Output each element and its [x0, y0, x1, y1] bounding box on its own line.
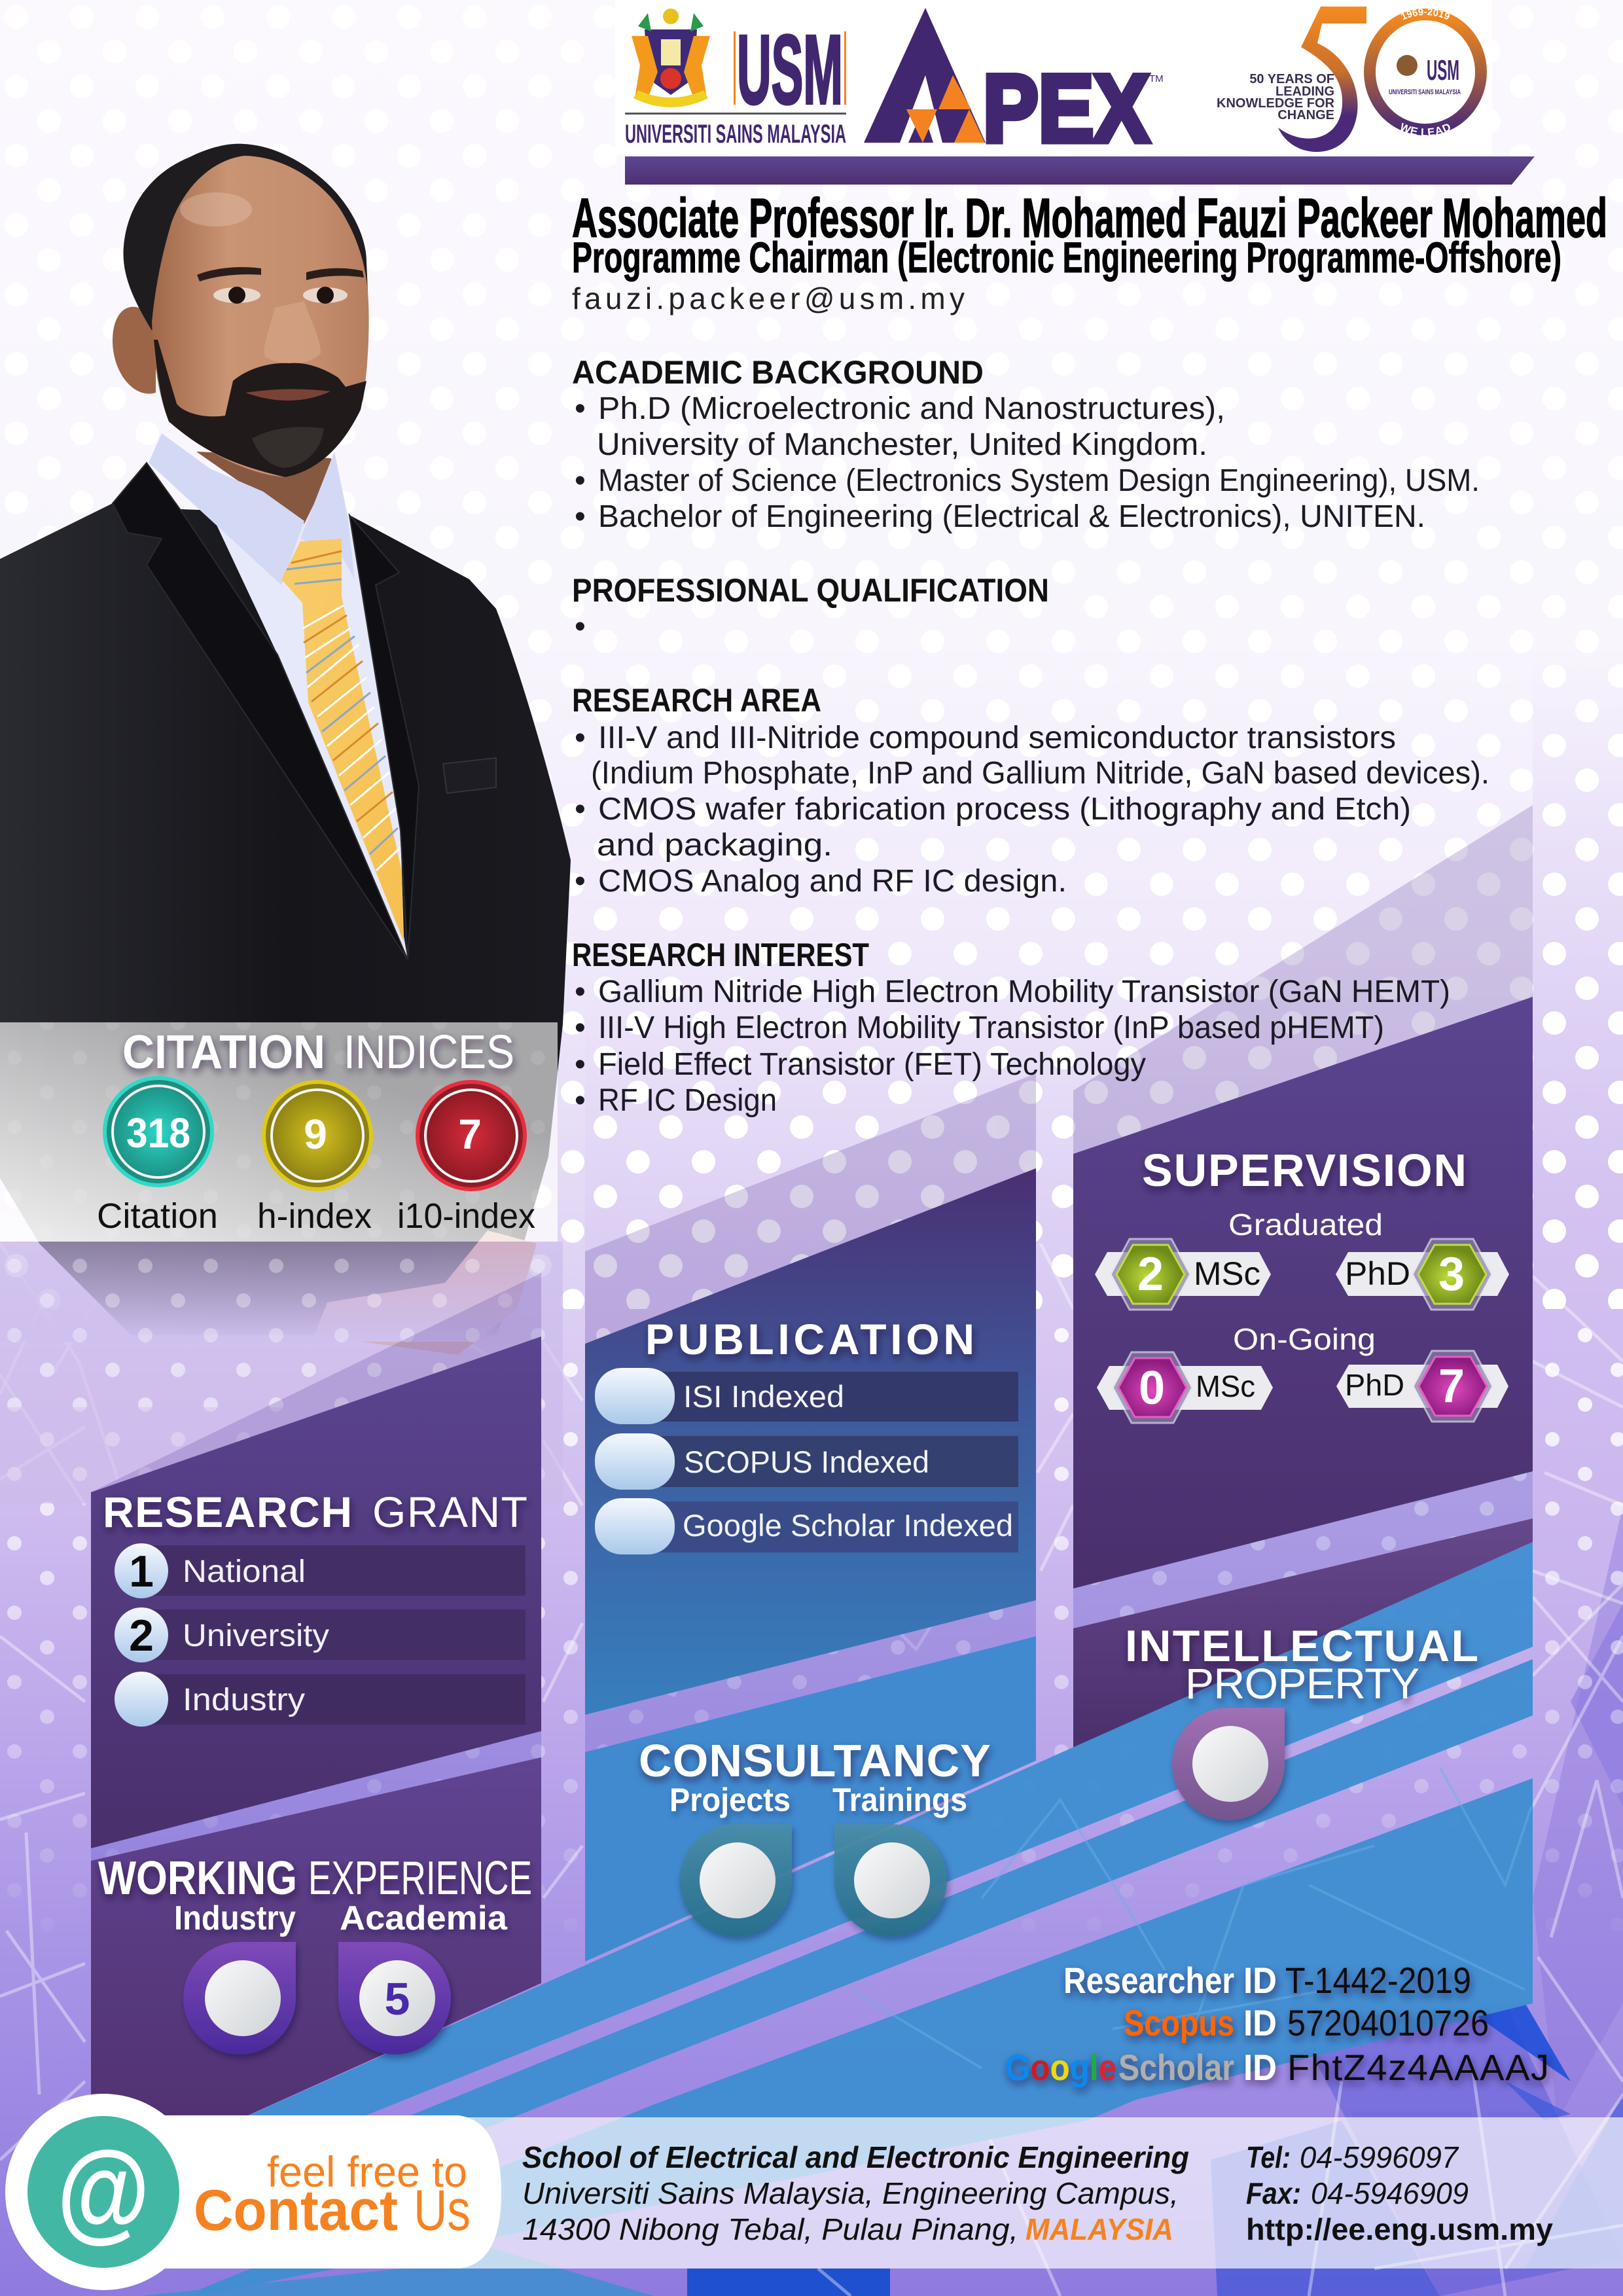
- eyes and brows: [197, 267, 364, 304]
- panel: supervision: [1073, 997, 1533, 1588]
- scopus ID line: [1124, 2002, 1489, 2043]
- ear: [113, 307, 156, 394]
- google scholar ID line: Scholar: [1118, 2047, 1234, 2088]
- heading: consultancy: CONSULTANCY: [639, 1735, 991, 1786]
- text block: academic background: [572, 354, 1480, 534]
- text block: research area: •: [575, 864, 586, 899]
- logo: USM crest: [632, 9, 710, 107]
- face: [152, 156, 369, 477]
- badge: graduated MSc 2: 2: [1137, 1248, 1164, 1300]
- icon: projects drop: [679, 1824, 792, 1937]
- researcher ID line: [1063, 1960, 1471, 2001]
- icon: industry drop: [183, 1942, 296, 2054]
- heading: citation indices: INDICES: [344, 1026, 514, 1079]
- sublabels: Industry: [174, 1899, 296, 1937]
- text block: research interest: [572, 937, 1450, 1118]
- badge: i10-index 7: [416, 1080, 527, 1191]
- contact badge: [5, 2094, 501, 2290]
- contact details: http://ee.eng.usm.my: [1246, 2212, 1553, 2246]
- text block: academic background: University of Manchester, United Kingdom.: [597, 427, 1207, 462]
- logo: 50 years: KNOWLEDGE FOR: [1217, 96, 1335, 111]
- breast pocket: [443, 758, 496, 793]
- title block: fauzi.packeer@usm.my: [572, 281, 965, 315]
- heading: intellectual property: [1125, 1621, 1478, 1708]
- heading: citation indices: CITATION: [122, 1026, 325, 1079]
- icon: academia drop with 5: [338, 1942, 451, 2054]
- google scholar ID line: ID: [1243, 2047, 1277, 2088]
- heading: citation indices: [122, 1026, 514, 1079]
- badge: on-going PhD 7: PhD: [1345, 1368, 1404, 1402]
- badge: i10-index 7: 7: [458, 1111, 482, 1158]
- contact us: Us: [414, 2178, 471, 2242]
- logo: USM wordmark: USM: [737, 14, 843, 124]
- researcher IDs: [1005, 1960, 1549, 2088]
- heading: research grant: [103, 1488, 527, 1536]
- text block: research area: [572, 682, 1489, 899]
- text block: research area: and packaging.: [597, 828, 832, 863]
- beard: [154, 340, 366, 477]
- text block: research interest: •: [575, 1011, 586, 1045]
- badge: graduated PhD 3: [1336, 1239, 1509, 1310]
- text block: research area: III-V and III-Nitride compound semiconductor transistors: [598, 721, 1396, 755]
- badge: graduated PhD 3: PhD: [1345, 1255, 1410, 1292]
- sublabels: [174, 1899, 508, 1937]
- text block: research interest: •: [575, 975, 586, 1009]
- badge: on-going PhD 7: [1336, 1351, 1508, 1422]
- diagonal blue bands: [196, 1542, 1533, 2296]
- translucent stripes above panels: [91, 805, 1533, 1492]
- row: SCOPUS indexed: [595, 1433, 1018, 1490]
- sublabels: [669, 1782, 967, 1818]
- panel: publication: [585, 1168, 1036, 1715]
- text block: academic background: •: [575, 391, 586, 426]
- text block: academic background: ACADEMIC BACKGROUND: [572, 354, 984, 391]
- neck: [196, 452, 334, 524]
- heading: supervision: SUPERVISION: [1142, 1145, 1467, 1196]
- heading: research grant: GRANT: [372, 1488, 527, 1536]
- address text: 14300 Nibong Tebal, Pulau Pinang,: [522, 2212, 1018, 2246]
- icon: at sign: @: [57, 2128, 150, 2253]
- label: on-going: On-Going: [1233, 1322, 1376, 1356]
- heading: publication: PUBLICATION: [645, 1315, 974, 1363]
- logo: 50 years: WE LEAD: [1400, 123, 1450, 135]
- row: university: [115, 1607, 526, 1662]
- row: google scholar indexed: [595, 1498, 1018, 1554]
- text block: academic background: Bachelor of Engineering (Electrical & Electronics), UNITEN.: [598, 499, 1425, 534]
- hand: [314, 1230, 537, 1355]
- text block: research interest: •: [575, 1047, 586, 1082]
- nose: [264, 301, 321, 364]
- logo: 50 years: [1217, 7, 1487, 152]
- logo: 50 years: 50 YEARS OF: [1249, 72, 1334, 86]
- logo: USM wordmark: [625, 14, 846, 149]
- address text: Universiti Sains Malaysia, Engineering Campus,: [522, 2176, 1179, 2210]
- icon: IP drop: [1172, 1708, 1285, 1820]
- text block: professional qualification: •: [575, 609, 586, 644]
- logo: 50 years: USM: [1427, 54, 1459, 86]
- text block: research area: •: [575, 792, 586, 827]
- badge: graduated PhD 3: 3: [1438, 1248, 1465, 1300]
- row: industry: Industry: [183, 1683, 305, 1717]
- contact details: Fax:: [1246, 2176, 1301, 2210]
- hair: [123, 144, 368, 331]
- header bar: [625, 156, 1535, 185]
- row: google scholar indexed: Google Scholar Indexed: [683, 1508, 1013, 1543]
- contact address band: [458, 2117, 1623, 2269]
- panel: working experience: [91, 1757, 541, 2115]
- badge: h-index 9: 9: [304, 1111, 327, 1158]
- text block: research area: •: [575, 721, 586, 755]
- text block: academic background: Ph.D (Microelectronic and Nanostructures),: [598, 391, 1225, 426]
- text block: professional qualification: [572, 572, 1049, 644]
- text block: professional qualification: PROFESSIONAL QUALIFICATION: [572, 572, 1049, 609]
- scopus ID line: ID: [1243, 2002, 1277, 2043]
- row: ISI indexed: [595, 1368, 1018, 1424]
- heading: research grant: RESEARCH: [103, 1488, 352, 1536]
- row: university: 2: [129, 1611, 154, 1660]
- icon: trainings drop: [834, 1824, 947, 1937]
- necktie: [281, 539, 404, 942]
- sublabels: Trainings: [832, 1782, 967, 1818]
- contact details: 04-5946909: [1311, 2176, 1469, 2210]
- row: national: [115, 1543, 526, 1598]
- address text: [522, 2140, 1189, 2246]
- text block: research area: (Indium Phosphate, InP and Gallium Nitride, GaN based devices).: [591, 756, 1489, 791]
- shirt collar: [149, 433, 355, 585]
- title block: [572, 187, 1607, 315]
- badge: graduated MSc 2: MSc: [1194, 1255, 1260, 1292]
- row: SCOPUS indexed: SCOPUS Indexed: [684, 1444, 929, 1479]
- panel: research grant: [91, 1336, 541, 1848]
- text block: research interest: •: [575, 1083, 586, 1118]
- text block: research interest: Field Effect Transistor (FET) Technology: [598, 1047, 1146, 1082]
- heading: working experience: EXPERIENCE: [308, 1852, 532, 1905]
- text block: research interest: Gallium Nitride High Electron Mobility Transistor (GaN HEMT): [598, 975, 1450, 1009]
- contact details: [1246, 2140, 1553, 2246]
- white logo backdrop: [615, 0, 1492, 154]
- heading: intellectual property: INTELLECTUAL: [1125, 1621, 1478, 1671]
- row: ISI indexed: ISI Indexed: [683, 1379, 844, 1414]
- badge: graduated MSc 2: [1095, 1239, 1271, 1310]
- logo: USM wordmark: UNIVERSITI SAINS MALAYSIA: [625, 120, 846, 149]
- row: university: University: [183, 1619, 329, 1653]
- heading: working experience: [98, 1852, 532, 1905]
- scopus ID line: Scopus: [1124, 2002, 1234, 2043]
- text block: academic background: •: [575, 499, 586, 534]
- lapels: [113, 463, 419, 960]
- citation labels: h-index: [257, 1196, 372, 1236]
- feel free to: feel free to: [267, 2147, 467, 2196]
- sublabels: Academia: [340, 1899, 508, 1937]
- scopus ID line: 57204010726: [1287, 2002, 1489, 2043]
- contact us: Contact: [194, 2178, 398, 2242]
- google scholar ID line: [1005, 2047, 1549, 2088]
- citation labels: i10-index: [397, 1196, 535, 1236]
- address text: School of Electrical and Electronic Engineering: [522, 2140, 1189, 2174]
- label: graduated: Graduated: [1228, 1208, 1383, 1242]
- panel: consultancy: [585, 1636, 1036, 1962]
- researcher ID line: ID: [1243, 1960, 1277, 2001]
- badge: citation 318: [103, 1076, 214, 1187]
- text block: research area: CMOS wafer fabrication process (Lithography and Etch): [598, 792, 1411, 827]
- researcher ID line: T-1442-2019: [1285, 1960, 1471, 2001]
- photo: portrait of the professor: [0, 144, 571, 1355]
- logo: 50 years: 1969-2019: [1400, 9, 1450, 20]
- badge: on-going PhD 7: 7: [1438, 1360, 1465, 1412]
- logo: 50 years: LEADING: [1275, 84, 1334, 99]
- faded overlay under band: [0, 1242, 563, 1503]
- logo: 50 years: CHANGE: [1277, 108, 1334, 122]
- shirt: [196, 484, 408, 960]
- row: national: National: [183, 1554, 306, 1589]
- contact details: 04-5996097: [1300, 2140, 1459, 2174]
- panel: citation indices: [0, 1022, 558, 1242]
- researcher ID line: Researcher: [1063, 1960, 1234, 2001]
- logo: 50 years: UNIVERSITI SAINS MALAYSIA: [1389, 88, 1461, 96]
- text block: research interest: RF IC Design: [598, 1083, 777, 1118]
- contact details: Tel:: [1246, 2140, 1291, 2174]
- panel: intellectual property: [1125, 1621, 1478, 1820]
- suit jacket: [0, 463, 571, 1335]
- badge: on-going MSc 0: 0: [1139, 1362, 1165, 1414]
- logo: APEX: PEX: [983, 55, 1149, 162]
- row: national: 1: [129, 1547, 154, 1596]
- text block: research interest: III-V High Electron Mobility Transistor (InP based pHEMT): [598, 1011, 1384, 1045]
- google scholar ID line: FhtZ4z4AAAAJ: [1287, 2047, 1549, 2088]
- badge: on-going MSc 0: MSc: [1196, 1369, 1255, 1403]
- text block: research area: CMOS Analog and RF IC design.: [598, 864, 1067, 899]
- badge: citation 318: 318: [126, 1109, 190, 1157]
- panel: intellectual property backdrop: [1073, 1518, 1533, 1748]
- badge: h-index 9: [262, 1080, 373, 1191]
- text block: academic background: Master of Science (Electronics System Design Engineering), USM.: [598, 463, 1480, 498]
- badge: on-going MSc 0: [1097, 1352, 1273, 1423]
- text block: academic background: •: [575, 463, 586, 498]
- citation labels: Citation: [97, 1196, 218, 1236]
- mouth: [245, 389, 330, 401]
- icon: academia drop with 5: 5: [385, 1973, 410, 2024]
- logo: APEX: [864, 8, 1164, 162]
- sublabels: Projects: [669, 1782, 791, 1818]
- logo: APEX: TM: [1149, 73, 1164, 84]
- text block: research interest: RESEARCH INTEREST: [572, 937, 869, 973]
- heading: working experience: WORKING: [98, 1852, 297, 1905]
- google scholar ID line: Google: [1005, 2047, 1116, 2088]
- row: industry: [115, 1672, 526, 1727]
- citation labels: [97, 1196, 535, 1236]
- text block: research area: RESEARCH AREA: [572, 682, 821, 719]
- heading: intellectual property: PROPERTY: [1185, 1659, 1419, 1708]
- address text: MALAYSIA: [1026, 2212, 1173, 2246]
